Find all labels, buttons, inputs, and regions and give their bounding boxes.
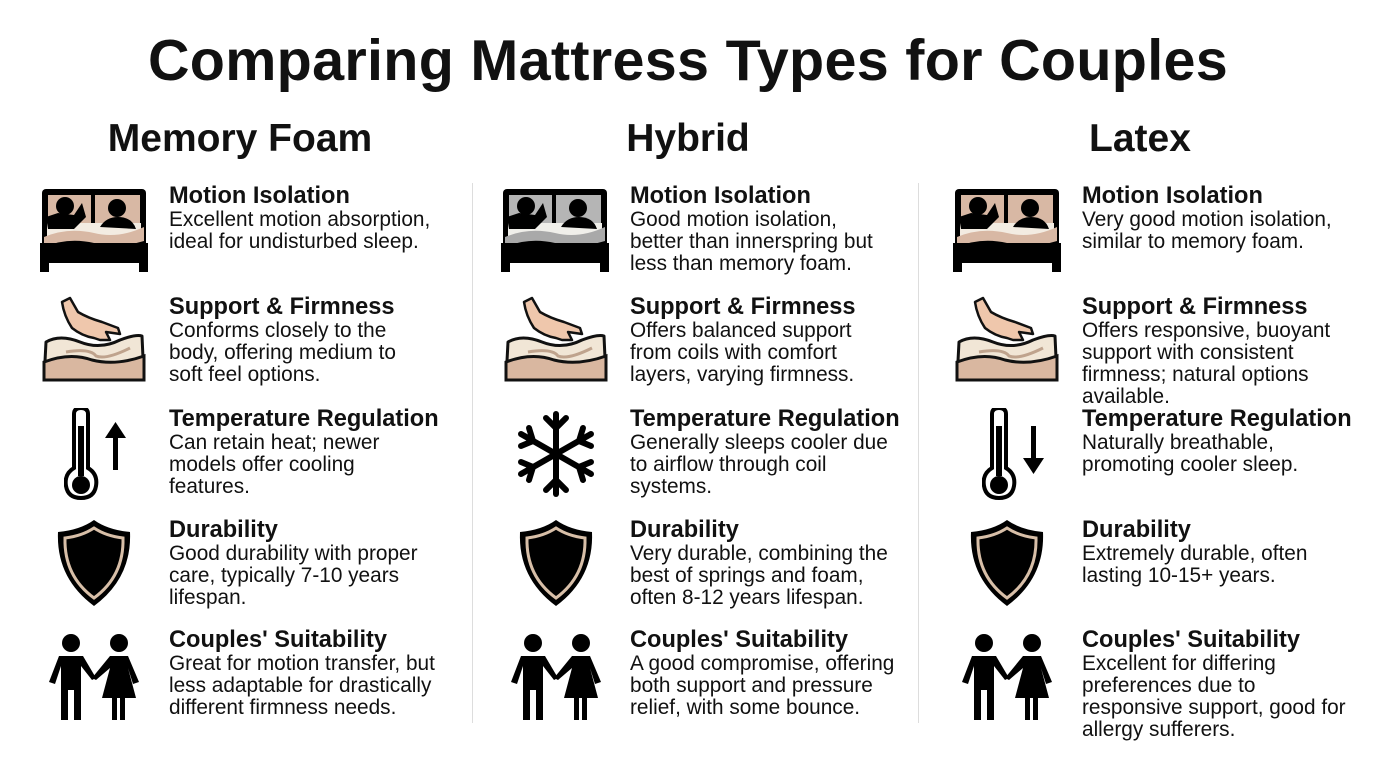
icon: hand on mattress (956, 296, 1058, 382)
text: support (1082, 294, 1330, 408)
text: motion isolation (1082, 183, 1332, 253)
icon: snowflake (518, 411, 594, 497)
text: durability: Very durable, combining the (630, 542, 888, 565)
text: temperature: Can retain heat; newer (169, 431, 379, 454)
text: motion isolation: Excellent motion absorption, (169, 208, 430, 231)
text: support (169, 294, 396, 386)
text: couples: relief, with some bounce. (630, 696, 860, 719)
text: support: support with consistent (1082, 341, 1294, 364)
text: support (630, 294, 855, 386)
text: temperature: features. (169, 475, 250, 498)
column heading: Latex: Latex (1089, 117, 1191, 160)
icon: hand on mattress (42, 296, 146, 382)
text: temperature: Temperature Regulation (630, 406, 900, 432)
text: durability: Durability (630, 517, 739, 543)
text: couples: Great for motion transfer, but (169, 652, 435, 675)
text: durability: Good durability with proper (169, 542, 418, 565)
text: durability: best of springs and foam, (630, 564, 864, 587)
text: durability (169, 517, 418, 609)
text: couples: preferences due to (1082, 674, 1255, 697)
icon: shield (58, 520, 130, 606)
text: durability: Extremely durable, often (1082, 542, 1307, 565)
text: couples: allergy sufferers. (1082, 718, 1235, 741)
text: couples: responsive support, good for (1082, 696, 1346, 719)
text: motion isolation: ideal for undisturbed sleep. (169, 230, 419, 253)
text: temperature: models offer cooling (169, 453, 355, 476)
icon: hand on mattress (504, 296, 608, 382)
text: couples (169, 627, 435, 719)
text: temperature: Temperature Regulation (169, 406, 439, 432)
icon: thermometer down (982, 408, 1044, 500)
icon: shield (520, 520, 592, 606)
icon: thermometer up (64, 408, 126, 500)
column heading: Hybrid: Hybrid (626, 117, 750, 160)
text: motion isolation: Good motion isolation, (630, 208, 837, 231)
text: couples (630, 627, 894, 719)
text: temperature (630, 406, 900, 498)
text: couples (1082, 627, 1346, 741)
text: temperature (1082, 406, 1352, 476)
text: motion isolation (169, 183, 430, 253)
text: support: firmness; natural options (1082, 363, 1309, 386)
text: durability: Durability (1082, 517, 1191, 543)
icon: bed couple gray (501, 189, 609, 272)
text: motion isolation: Motion Isolation (1082, 183, 1263, 209)
text: couples: Excellent for differing (1082, 652, 1276, 675)
icon: couple (962, 634, 1052, 720)
text: couples: Couples' Suitability (630, 627, 848, 653)
text: durability: often 8-12 years lifespan. (630, 586, 864, 609)
text: durability (630, 517, 888, 609)
text: temperature: to airflow through coil (630, 453, 827, 476)
text: support: layers, varying firmness. (630, 363, 854, 386)
column heading: Memory Foam: Memory Foam (108, 117, 372, 160)
text: temperature: Naturally breathable, (1082, 431, 1274, 454)
icon: couple (511, 634, 601, 720)
panel: memory foam (40, 183, 439, 720)
title: Comparing Mattress Types for Couples (148, 29, 1228, 93)
text: couples: both support and pressure (630, 674, 873, 697)
text: motion isolation: Motion Isolation (169, 183, 350, 209)
text: durability: lifespan. (169, 586, 246, 609)
text: durability (1082, 517, 1307, 587)
text: motion isolation: better than innerspring but (630, 230, 873, 253)
text: support: from coils with comfort (630, 341, 837, 364)
icon: bed couple (953, 189, 1061, 272)
text: motion isolation: less than memory foam. (630, 252, 852, 275)
text: couples: different firmness needs. (169, 696, 396, 719)
text: motion isolation (630, 183, 873, 275)
text: motion isolation: similar to memory foam. (1082, 230, 1304, 253)
panel: hybrid (501, 183, 900, 720)
text: temperature: promoting cooler sleep. (1082, 453, 1298, 476)
text: support: Offers responsive, buoyant (1082, 319, 1330, 342)
panel: latex (953, 183, 1352, 741)
text: couples: Couples' Suitability (169, 627, 387, 653)
text: temperature: Generally sleeps cooler due (630, 431, 888, 454)
text: support: soft feel options. (169, 363, 320, 386)
text: support: available. (1082, 385, 1170, 408)
text: temperature: Temperature Regulation (1082, 406, 1352, 432)
text: support: body, offering medium to (169, 341, 396, 364)
text: support: Support & Firmness (630, 294, 855, 320)
text: temperature (169, 406, 439, 498)
text: support: Conforms closely to the (169, 319, 386, 342)
text: motion isolation: Very good motion isolation, (1082, 208, 1332, 231)
text: durability: Durability (169, 517, 278, 543)
text: couples: less adaptable for drastically (169, 674, 431, 697)
text: couples: A good compromise, offering (630, 652, 894, 675)
icon: bed couple (40, 189, 148, 272)
text: support: Offers balanced support (630, 319, 852, 342)
text: couples: Couples' Suitability (1082, 627, 1300, 653)
text: support: Support & Firmness (169, 294, 394, 320)
text: durability: lasting 10-15+ years. (1082, 564, 1276, 587)
icon: shield (970, 520, 1044, 606)
text: durability: care, typically 7-10 years (169, 564, 399, 587)
text: motion isolation: Motion Isolation (630, 183, 811, 209)
text: support: Support & Firmness (1082, 294, 1307, 320)
text: temperature: systems. (630, 475, 712, 498)
icon: couple (49, 634, 139, 720)
